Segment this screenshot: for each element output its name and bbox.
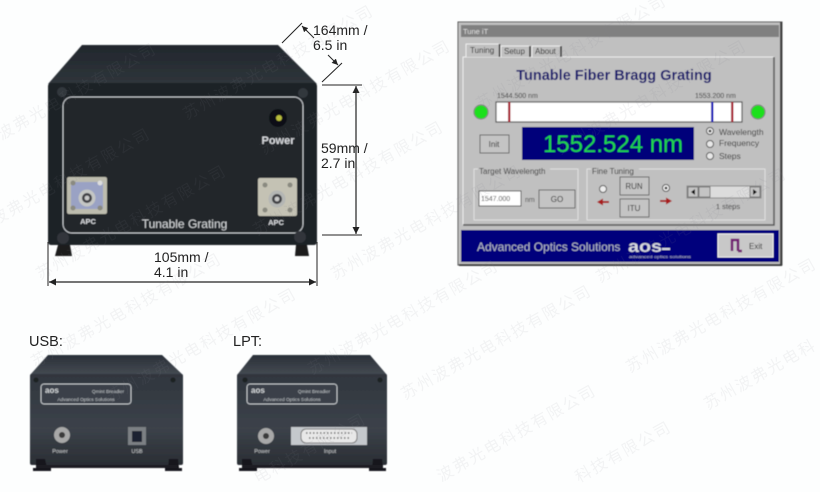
LPT label: LPT:	[233, 334, 262, 350]
watermark: 苏州波弗光电科技有限公司	[257, 37, 454, 158]
footer banner: Advanced Optics Solutions	[477, 240, 620, 254]
display mode radios: Wavelength	[719, 127, 764, 137]
watermark: 苏州波弗光电科技有限公司	[250, 118, 447, 239]
USB device name plate: aos	[45, 386, 59, 395]
watermark: 苏州波弗光电科技有限公司	[623, 255, 820, 376]
watermark: 苏州波弗光电科技有限公司	[305, 257, 502, 378]
scale range labels: 1544.500 nm	[497, 93, 538, 100]
height dimension: 59mm /	[321, 140, 368, 156]
LPT device name plate: Advanced Optics Solutions	[263, 397, 321, 403]
LPT device rear view	[237, 355, 387, 471]
width dimension: 105mm /	[154, 249, 209, 265]
width dimension	[48, 242, 317, 286]
device label: Tunable Grating	[142, 217, 227, 231]
wavelength readout	[522, 127, 694, 160]
fine tuning group: ITU	[628, 204, 641, 213]
parallel port connector: Input	[324, 449, 337, 455]
parallel port connector	[291, 427, 367, 455]
LPT device power socket	[254, 428, 274, 455]
watermark: 苏州波弗光电科技有限公司	[103, 285, 300, 406]
watermark: 苏州波弗光电科技有限公司	[28, 250, 225, 371]
tabs	[466, 44, 561, 57]
title bar	[461, 25, 779, 37]
depth dimension: 164mm /	[313, 22, 368, 38]
USB device name plate: Qmint Breadier	[92, 389, 125, 395]
watermark: 苏州波弗光电科技有限公司	[180, 2, 377, 123]
fine tuning group	[587, 166, 765, 220]
USB device rear view	[30, 355, 183, 471]
USB device name plate	[41, 384, 131, 404]
left APC connector: APC	[80, 217, 96, 226]
title bar: Tune iT	[463, 27, 489, 36]
watermark: 科技有限公司	[572, 418, 675, 486]
target wavelength group: nm	[525, 197, 535, 204]
display mode radios: Frequency	[719, 138, 760, 148]
footer banner	[461, 230, 779, 262]
watermark: 苏州波弗光电科技有限公司	[328, 162, 525, 283]
fine tuning group: RUN	[625, 182, 643, 191]
USB port	[128, 427, 146, 455]
exit button	[718, 234, 773, 257]
USB device name plate: Advanced Optics Solutions	[57, 397, 115, 403]
software window: Tune iT: 1553.200 nm	[695, 93, 736, 100]
init button: Init	[489, 140, 500, 149]
target wavelength group: 1547.000	[481, 196, 510, 203]
watermark: 波弗光电科技有限公司	[434, 381, 600, 485]
LPT device name plate	[247, 384, 337, 404]
tabs: About	[535, 47, 557, 56]
right APC connector	[258, 178, 297, 227]
wavelength slider bar	[496, 102, 742, 122]
USB label: USB:	[29, 334, 63, 350]
watermark: 苏州波弗光电科技有限公司	[553, 37, 750, 158]
watermark: 苏州波弗光电科技有限公司	[33, 162, 230, 283]
tabs: Tuning	[470, 46, 494, 55]
power label: Power	[261, 135, 295, 147]
fine tuning group: 1 steps	[716, 202, 740, 211]
watermark: 苏州波弗光电科技有限公司	[593, 165, 790, 286]
target wavelength group: GO	[551, 195, 563, 204]
power led	[269, 109, 287, 127]
height dimension	[321, 85, 368, 235]
LPT device name plate: Qmint Breadier	[298, 389, 331, 395]
tab panel	[463, 57, 774, 225]
init button	[480, 135, 509, 153]
watermark: 电科技有限公司	[251, 410, 370, 487]
watermark: 苏州波弗光电科	[701, 336, 820, 413]
USB port: USB	[131, 449, 143, 455]
wavelength readout: 1552.524 nm	[543, 131, 683, 158]
footer banner: advanced optics solutions	[629, 254, 691, 259]
width dimension: 4.1 in	[154, 264, 188, 280]
fine tuning group: Fine Tuning	[592, 167, 634, 176]
watermark: 苏州波弗光电科技有限公司	[398, 282, 595, 403]
USB device power socket	[52, 427, 70, 455]
USB device power socket: Power	[52, 449, 68, 455]
right APC connector: APC	[268, 218, 284, 227]
LPT device name plate: aos	[251, 386, 265, 395]
display mode radios	[706, 127, 764, 161]
target wavelength group: Target Wavelength	[479, 167, 545, 176]
LPT device power socket: Power	[254, 449, 270, 455]
depth dimension	[282, 22, 368, 82]
window heading: Tunable Fiber Bragg Grating	[516, 68, 712, 84]
target wavelength group	[474, 166, 578, 220]
height dimension: 2.7 in	[321, 155, 355, 171]
depth dimension: 6.5 in	[313, 37, 347, 53]
tabs: Setup	[504, 47, 525, 56]
green indicators	[474, 105, 765, 119]
main device: tunable grating front view	[48, 45, 317, 256]
left APC connector	[67, 177, 107, 226]
footer banner: aos	[628, 237, 662, 256]
exit button: Exit	[749, 242, 763, 251]
software window: Tune iT	[458, 22, 782, 265]
display mode radios: Steps	[719, 151, 741, 161]
